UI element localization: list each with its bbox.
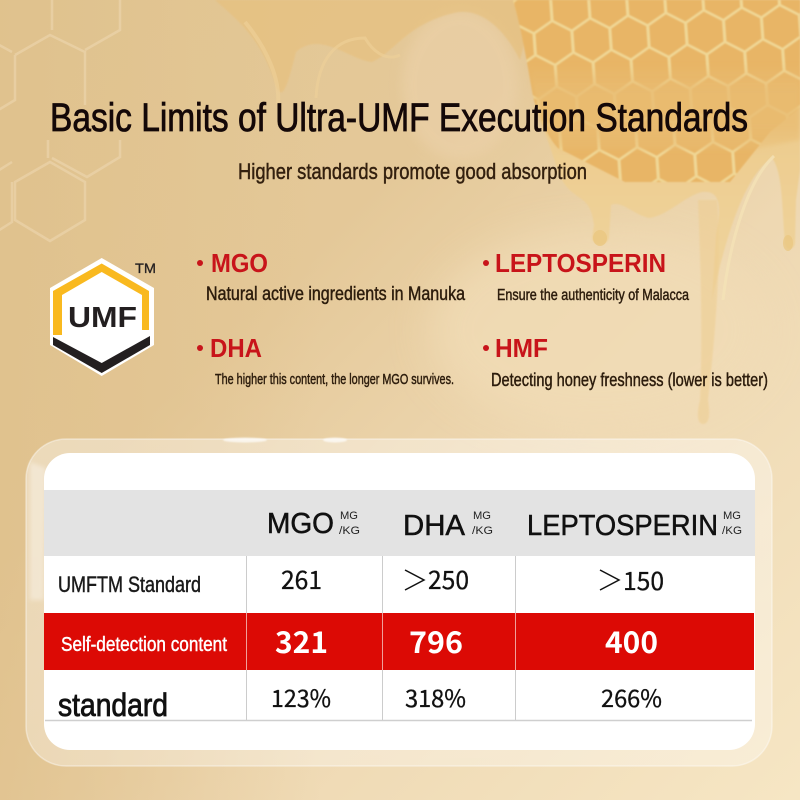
icon: UMF hexagon logo: TM	[135, 260, 156, 276]
table header row: MG	[473, 510, 491, 522]
icon: UMF hexagon logo	[50, 258, 156, 376]
table row: UMFTM Standard	[58, 561, 664, 598]
table header row: /KG	[339, 525, 360, 537]
table row: Self-detection content: Self-detection content	[61, 634, 227, 656]
table header row: /KG	[472, 525, 493, 537]
table row: UMFTM Standard: 150	[623, 562, 664, 598]
item: DHA	[197, 333, 454, 388]
honeycomb	[513, 0, 800, 300]
table row: Self-detection content: 321	[275, 618, 328, 662]
table row: standard: 318%	[405, 679, 466, 714]
table row: UMFTM Standard: 250	[428, 561, 469, 597]
table row: Self-detection content: 796	[409, 618, 463, 662]
item: HMF	[483, 333, 768, 390]
table header row: LEPTOSPERIN	[527, 510, 718, 542]
item: LEPTOSPERIN: LEPTOSPERIN	[495, 248, 666, 278]
item: MGO: MGO	[211, 248, 268, 278]
item: LEPTOSPERIN: Ensure the authenticity of Malacca	[497, 287, 689, 304]
table row: UMFTM Standard: UMFTM Standard	[58, 572, 201, 597]
table row: Self-detection content	[44, 613, 754, 670]
item: DHA: DHA	[210, 333, 262, 363]
table row: standard: standard	[58, 687, 168, 723]
table row: standard: 266%	[601, 679, 662, 714]
table header row: MGO	[267, 508, 334, 540]
item: MGO	[197, 248, 465, 305]
table header row	[44, 490, 755, 556]
item: MGO: Natural active ingredients in Manuka	[206, 284, 465, 305]
icon: UMF hexagon logo: UMF	[68, 302, 137, 334]
table header row: DHA	[403, 510, 466, 542]
item: HMF: HMF	[495, 333, 548, 363]
table row: Self-detection content: 400	[605, 618, 658, 662]
table header row: /KG	[722, 525, 742, 537]
panel: glass frame	[26, 438, 772, 766]
table row: UMFTM Standard: 261	[281, 561, 322, 597]
table row: standard: 123%	[271, 679, 331, 714]
table header row: MG	[340, 510, 358, 522]
table row: standard	[58, 679, 662, 723]
item: LEPTOSPERIN	[483, 248, 689, 304]
subtitle: Higher standards promote good absorption	[238, 159, 587, 184]
main drips	[698, 200, 719, 424]
panel: comparison table	[44, 453, 755, 750]
item: DHA: The higher this content, the longer MGO survives.	[215, 372, 454, 388]
decorative hexagons	[0, 0, 120, 241]
upper centre honey band	[215, 0, 535, 92]
table header row: MG	[723, 510, 741, 522]
